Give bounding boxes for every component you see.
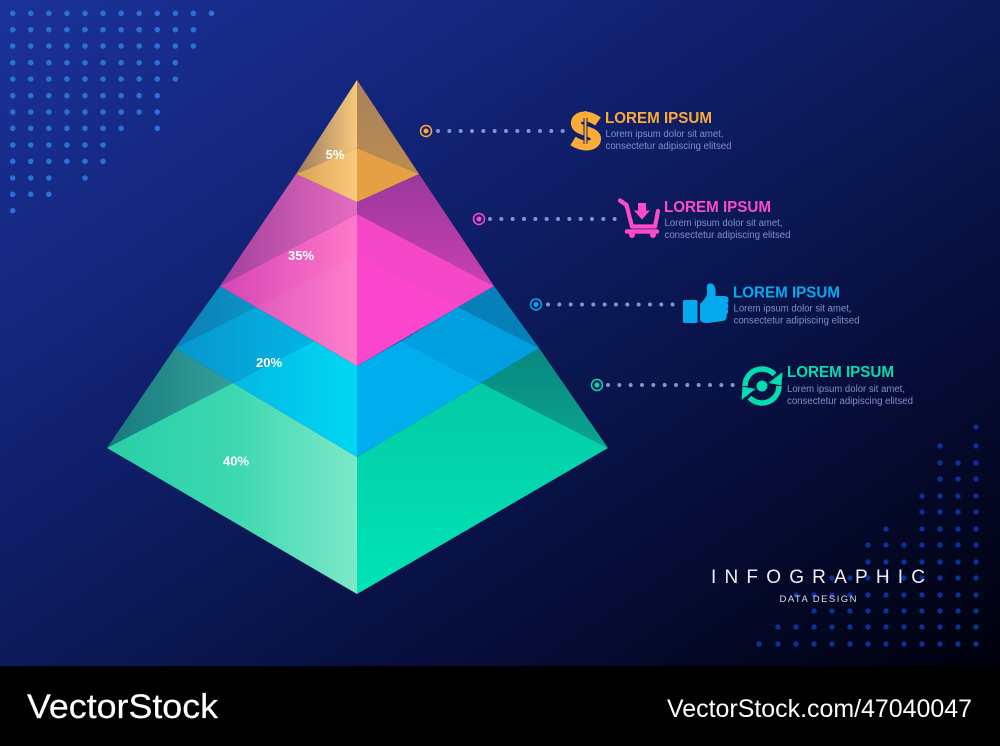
- icon: thumbs up: [683, 283, 729, 323]
- heading: LOREM IPSUM: [787, 364, 894, 381]
- description: [606, 129, 732, 152]
- heading: LOREM IPSUM: [733, 284, 840, 302]
- callout: green item: [592, 364, 913, 407]
- description: Lorem ipsum dolor sit amet,: [664, 218, 782, 229]
- description: Lorem ipsum dolor sit amet,: [606, 129, 724, 140]
- icon: dollar: [573, 111, 598, 150]
- callout: pink item: [474, 199, 790, 241]
- dotted connector: [438, 129, 564, 133]
- description: Lorem ipsum dolor sit amet,: [734, 304, 852, 314]
- dot pattern: top left: [13, 13, 212, 211]
- description: consectetur adipiscing elitsed: [664, 230, 790, 241]
- subtitle: data design: DATA DESIGN: [780, 594, 857, 605]
- description: Lorem ipsum dolor sit amet,: [787, 384, 905, 395]
- label: 40%: 40%: [223, 454, 249, 468]
- dotted connector: [490, 217, 618, 221]
- callout: blue item: [530, 283, 860, 326]
- heading: LOREM IPSUM: [664, 199, 771, 216]
- callout: gold item: [420, 110, 732, 152]
- dot pattern: bottom right: [759, 427, 977, 644]
- label: 35%: 35%: [288, 248, 314, 263]
- description: [734, 304, 860, 326]
- description: consectetur adipiscing elitsed: [787, 396, 913, 407]
- pyramid: [107, 80, 608, 594]
- dotted connector: [608, 383, 734, 387]
- heading: LOREM IPSUM: [605, 110, 712, 127]
- description: consectetur adipiscing elitsed: [606, 141, 732, 152]
- image id: VectorStock.com/47040047: [667, 695, 972, 723]
- layer: 35% pink: [220, 174, 494, 366]
- description: [664, 218, 790, 241]
- title: infographic: INFOGRAPHIC: [711, 567, 925, 588]
- dotted connector: [548, 302, 674, 306]
- target marker: [420, 126, 432, 136]
- layer: 40% green: [107, 348, 608, 594]
- target marker: [592, 380, 602, 390]
- target marker: [474, 214, 484, 224]
- icon: sync arrows: [742, 369, 782, 403]
- label: 20%: 20%: [256, 355, 282, 370]
- target marker: [530, 299, 542, 310]
- label: 5%: 5%: [326, 147, 345, 162]
- description: consectetur adipiscing elitsed: [734, 316, 860, 326]
- description: [787, 384, 913, 407]
- footer band: [0, 666, 1000, 746]
- icon: cart: [620, 200, 658, 238]
- layer: 20% blue: [175, 286, 539, 457]
- layer: 5% gold: [296, 80, 419, 202]
- logo: VectorStock: VectorStock: [27, 688, 219, 726]
